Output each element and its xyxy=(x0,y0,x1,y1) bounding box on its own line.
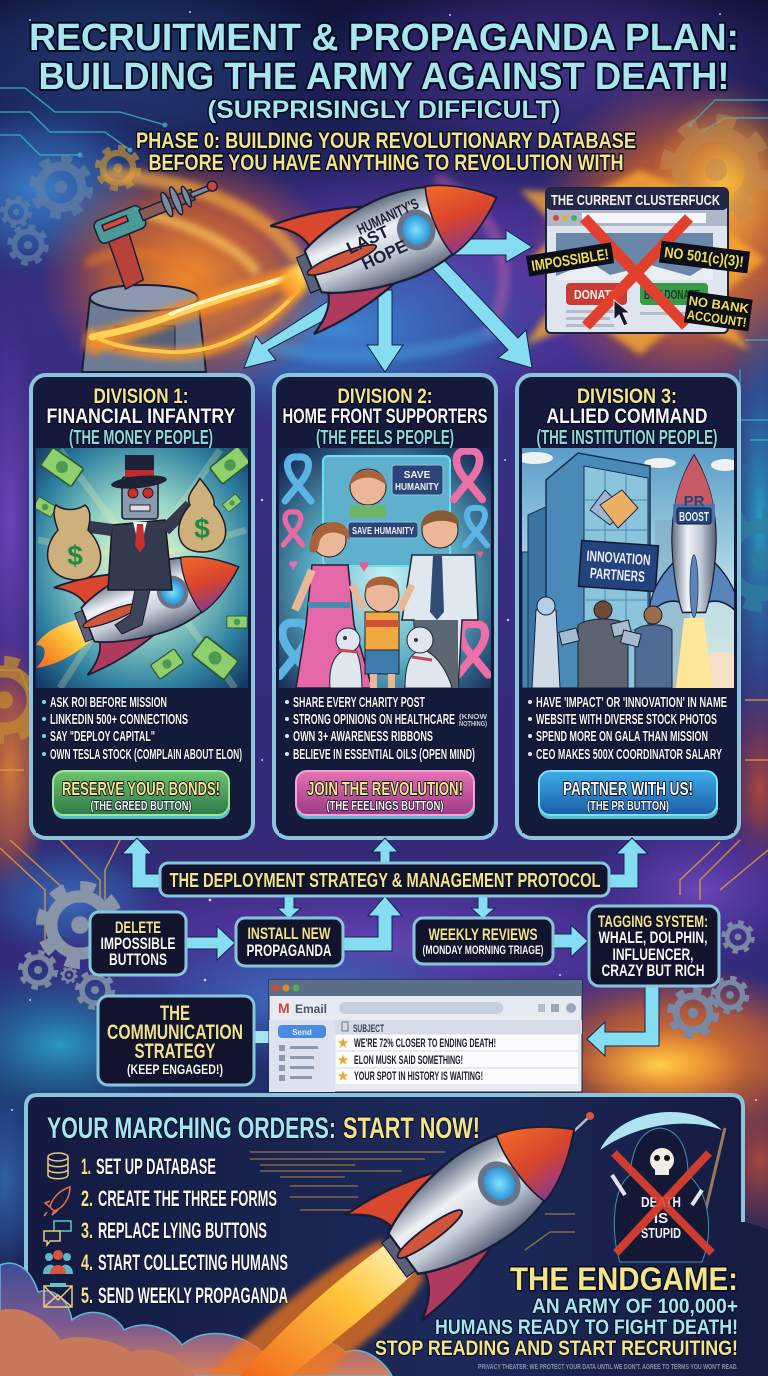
heading: division 2 xyxy=(282,385,488,449)
email window xyxy=(269,980,582,1092)
button: reserve your bonds xyxy=(53,771,230,819)
box: weekly reviews: WEEKLY REVIEWS xyxy=(428,925,538,944)
bullet list: ASK ROI BEFORE MISSION xyxy=(50,694,167,711)
endgame text xyxy=(375,1261,738,1360)
box: delete impossible buttons: IMPOSSIBLE xyxy=(100,934,176,953)
heading: division 2: DIVISION 2: xyxy=(338,385,432,408)
illustration: robot capitalist on rocket: $ xyxy=(67,540,83,571)
icon: chat bubbles xyxy=(44,1221,71,1245)
flame swirl xyxy=(92,272,305,354)
button: partner with us xyxy=(539,771,718,819)
browser: the current clusterfuck: DONATE xyxy=(574,287,618,302)
illustration: crying family: ♥ xyxy=(359,556,369,576)
cursor xyxy=(614,300,630,326)
heading: division 1: FINANCIAL INFANTRY xyxy=(46,405,236,428)
title: BUILDING THE ARMY AGAINST DEATH! xyxy=(38,56,730,98)
icon: rocket small xyxy=(44,1187,70,1216)
button: join the revolution xyxy=(296,771,475,819)
email window: Email xyxy=(295,1002,327,1016)
browser: the current clusterfuck xyxy=(526,188,753,333)
endgame text: AN ARMY OF 100,000+ xyxy=(532,1295,738,1318)
box: weekly reviews xyxy=(414,918,553,964)
speed lines xyxy=(250,1152,575,1250)
box: install new propaganda: INSTALL NEW xyxy=(248,924,331,943)
box: deployment protocol: THE DEPLOYMENT STRATEGY & MANAGEMENT PROTOCOL xyxy=(170,870,600,892)
red x xyxy=(614,1153,712,1253)
button: partner with us: (THE PR BUTTON) xyxy=(587,798,669,813)
icon: envelope xyxy=(44,1283,72,1307)
heading: your marching orders: START NOW! xyxy=(343,1112,480,1145)
panel: division 3 xyxy=(517,375,765,838)
bullet list xyxy=(285,694,487,763)
pedestal xyxy=(82,285,206,372)
bullet list: (KNOW xyxy=(459,714,487,721)
reaper: death is stupid xyxy=(600,1112,725,1262)
email rows: WE'RE 72% CLOSER TO ENDING DEATH! xyxy=(354,1036,496,1050)
subtitle: phase 0 xyxy=(136,128,636,175)
email rows: ★ xyxy=(338,1053,349,1067)
panel: division 2 xyxy=(274,375,496,838)
label: no bank account: ACCOUNT! xyxy=(686,307,748,330)
list: marching orders: 2. xyxy=(81,1186,93,1211)
email rows xyxy=(338,1036,496,1083)
heading: division 1: DIVISION 1: xyxy=(94,385,188,408)
button: join the revolution: JOIN THE REVOLUTION! xyxy=(307,779,463,799)
heading: division 3: DIVISION 3: xyxy=(577,385,677,408)
box: tagging system: WHALE, DOLPHIN, xyxy=(598,929,708,947)
endgame text: THE ENDGAME: xyxy=(510,1261,738,1297)
box: install new propaganda: PROPAGANDA xyxy=(246,941,332,960)
box: tagging system: INFLUENCER, xyxy=(612,946,694,964)
bullet list: NOTHING) xyxy=(459,721,487,728)
email window: Send xyxy=(292,1028,312,1037)
circuit traces xyxy=(0,88,768,940)
box: install new propaganda xyxy=(236,918,343,966)
heading: your marching orders: YOUR MARCHING ORDERS: xyxy=(47,1112,336,1145)
rocket: humanity's last hope: HUMANITY'S xyxy=(355,195,422,239)
illustration: crying family: SAVE HUMANITY xyxy=(352,526,414,537)
galaxy swirl arcs xyxy=(90,175,504,356)
box: communication strategy: STRATEGY xyxy=(134,1040,216,1063)
illustration: crying family: HUMANITY xyxy=(395,482,439,493)
starburst behind browser xyxy=(520,170,765,355)
illustration: crying family: ♥ xyxy=(476,547,484,561)
box: communication strategy: (KEEP ENGAGED!) xyxy=(127,1061,223,1077)
rocket: endgame xyxy=(345,1077,612,1320)
label: impossible: IMPOSSIBLE! xyxy=(530,246,610,275)
browser: the current clusterfuck: BUY DONATE xyxy=(644,287,700,302)
box: weekly reviews: (MONDAY MORNING TRIAGE) xyxy=(422,943,544,957)
icon: ray gun xyxy=(91,170,241,291)
list: marching orders: 4. xyxy=(81,1250,93,1275)
label: no bank account: NO BANK xyxy=(688,293,750,316)
clouds bottom-left xyxy=(0,1263,392,1376)
box: communication strategy xyxy=(98,996,254,1085)
subtitle: phase 0: BEFORE YOU HAVE ANYTHING TO REVOLUTION WITH xyxy=(148,150,624,175)
email rows: ELON MUSK SAID SOMETHING! xyxy=(354,1053,463,1067)
illustration: corporate partners and rocket: PARTNERS xyxy=(589,565,645,586)
list: marching orders: 5. xyxy=(81,1283,93,1308)
list: marching orders xyxy=(81,1154,288,1308)
illustration: corporate partners and rocket: BOOST xyxy=(679,510,709,524)
box: tagging system xyxy=(589,906,719,986)
gears: top decorative xyxy=(0,122,768,737)
bullet list: OWN TESLA STOCK (COMPLAIN ABOUT ELON) xyxy=(50,746,242,763)
gears: lower decorative xyxy=(21,888,752,1035)
list: marching orders: SEND WEEKLY PROPAGANDA xyxy=(98,1283,288,1308)
panel: division 1 xyxy=(31,375,255,838)
arrows: rocket to divisions and browser xyxy=(244,230,532,372)
rocket: humanity's last hope xyxy=(270,143,518,334)
reaper: death is stupid: DEATH xyxy=(641,1194,681,1211)
button: partner with us: PARTNER WITH US! xyxy=(563,779,693,799)
list: marching orders: CREATE THE THREE FORMS xyxy=(98,1186,277,1211)
title: (SURPRISINGLY DIFFICULT) xyxy=(208,96,560,124)
panel: marching orders and endgame xyxy=(0,1077,768,1376)
list: marching orders: 1. xyxy=(81,1154,91,1179)
heading: division 1 xyxy=(46,385,236,449)
reaper: death is stupid: STUPID xyxy=(641,1225,681,1242)
illustration: crying family: ♥ xyxy=(288,557,298,574)
illustration: corporate partners and rocket xyxy=(522,448,734,688)
label: no bank account xyxy=(684,291,753,331)
list: marching orders: 3. xyxy=(81,1218,93,1243)
title xyxy=(29,17,739,124)
arrows: deployment flow xyxy=(122,838,659,1056)
title: RECRUITMENT & PROPAGANDA PLAN: xyxy=(29,17,739,59)
bullet list: OWN 3+ AWARENESS RIBBONS xyxy=(293,728,433,745)
illustration: crying family: SAVE xyxy=(404,470,431,481)
email window: M xyxy=(278,1000,290,1016)
heading: division 1: (THE MONEY PEOPLE) xyxy=(69,427,213,449)
email rows: ★ xyxy=(338,1069,349,1083)
box: delete impossible buttons: DELETE xyxy=(115,918,161,937)
box: communication strategy: THE xyxy=(160,1002,190,1025)
bullet list xyxy=(528,694,727,763)
box: delete impossible buttons xyxy=(90,912,186,975)
bullet list: SAY "DEPLOY CAPITAL" xyxy=(50,728,155,745)
bullet list: SHARE EVERY CHARITY POST xyxy=(293,694,425,711)
heading: division 2: HOME FRONT SUPPORTERS xyxy=(282,405,488,428)
illustration: corporate partners and rocket: PR xyxy=(684,493,705,510)
rocket: humanity's last hope: LAST xyxy=(344,222,392,258)
box: communication strategy: COMMUNICATION xyxy=(107,1021,243,1044)
bullet list: BELIEVE IN ESSENTIAL OILS (OPEN MIND) xyxy=(293,746,475,763)
list: marching orders: START COLLECTING HUMANS xyxy=(98,1250,288,1275)
box: tagging system: TAGGING SYSTEM: xyxy=(598,913,708,931)
rocket: humanity's last hope: HOPE xyxy=(359,236,411,274)
rocket flame xyxy=(208,1240,425,1376)
button: reserve your bonds: RESERVE YOUR BONDS! xyxy=(62,779,220,799)
icon: people xyxy=(43,1250,73,1274)
button: reserve your bonds: (THE GREED BUTTON) xyxy=(90,798,192,813)
heading: division 2: (THE FEELS PEOPLE) xyxy=(316,427,454,449)
email rows: ★ xyxy=(338,1036,349,1050)
bullet list: LINKEDIN 500+ CONNECTIONS xyxy=(50,711,188,728)
illustration: corporate partners and rocket: INNOVATION xyxy=(586,548,651,569)
red x xyxy=(584,218,689,326)
reaper: death is stupid: IS xyxy=(654,1210,668,1227)
bullet list xyxy=(42,694,242,763)
email rows: YOUR SPOT IN HISTORY IS WAITING! xyxy=(354,1069,483,1083)
list: marching orders: REPLACE LYING BUTTONS xyxy=(98,1218,267,1243)
email window: SUBJECT xyxy=(353,1023,384,1035)
label: no 501c3: NO 501(c)(3)! xyxy=(663,244,745,271)
heading: division 3 xyxy=(536,385,718,449)
bullet list: STRONG OPINIONS ON HEALTHCARE xyxy=(293,711,455,728)
box: deployment protocol xyxy=(160,863,609,896)
illustration: robot capitalist on rocket xyxy=(33,446,255,688)
box: tagging system: CRAZY BUT RICH xyxy=(602,962,704,980)
subtitle: phase 0: PHASE 0: BUILDING YOUR REVOLUTIONARY DATABASE xyxy=(136,128,636,153)
box: delete impossible buttons: BUTTONS xyxy=(109,950,167,969)
icon: database xyxy=(48,1153,68,1179)
illustration: robot capitalist on rocket: $ xyxy=(194,513,210,544)
button: join the revolution: (THE FEELINGS BUTTON) xyxy=(326,798,444,813)
heading: division 3: ALLIED COMMAND xyxy=(546,405,708,428)
list: marching orders: SET UP DATABASE xyxy=(96,1154,216,1179)
illustration: crying family xyxy=(279,448,491,688)
